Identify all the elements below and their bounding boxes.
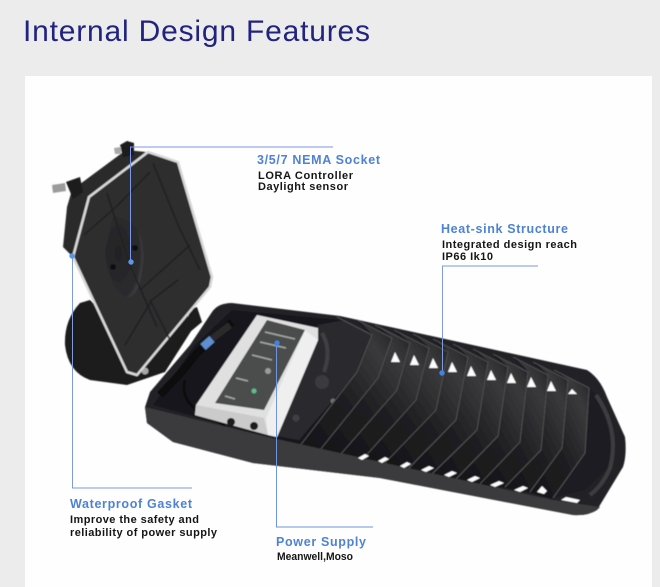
callout: waterproof gasket: Improve the safety and [70,514,199,526]
lid with white gasket [73,152,212,375]
callout: heat-sink structure: Heat-sink Structure [441,222,568,236]
lamp housing base [145,303,626,515]
callout: power supply [274,340,373,563]
callout: heat-sink structure: Integrated design reach [442,239,577,251]
product photo: street light housing [52,141,626,515]
callout: NEMA socket: Daylight sensor [258,181,349,193]
callout: heat-sink structure [439,222,577,376]
callout: waterproof gasket [69,253,218,539]
white vent gaps [358,352,580,503]
callout: NEMA socket: LORA Controller [258,170,354,182]
callout: waterproof gasket: Waterproof Gasket [70,497,193,511]
callout: NEMA socket: 3/5/7 NEMA Socket [257,153,381,167]
heat-sink fins [299,320,589,498]
fin edge highlights [299,317,589,498]
callout: power supply: Meanwell,Moso [277,551,353,563]
front rim band [145,407,600,515]
title: Internal Design Features [23,15,370,48]
callout: NEMA socket [128,147,381,265]
power supply box [195,315,318,437]
callout: heat-sink structure: IP66 Ik10 [442,251,493,263]
mounting arm and lid rear [52,141,202,385]
driver compartment [153,310,372,447]
callout: waterproof gasket: reliability of power supply [70,527,218,539]
callout: power supply: Power Supply [276,535,366,549]
cables and blue connector [160,322,232,425]
